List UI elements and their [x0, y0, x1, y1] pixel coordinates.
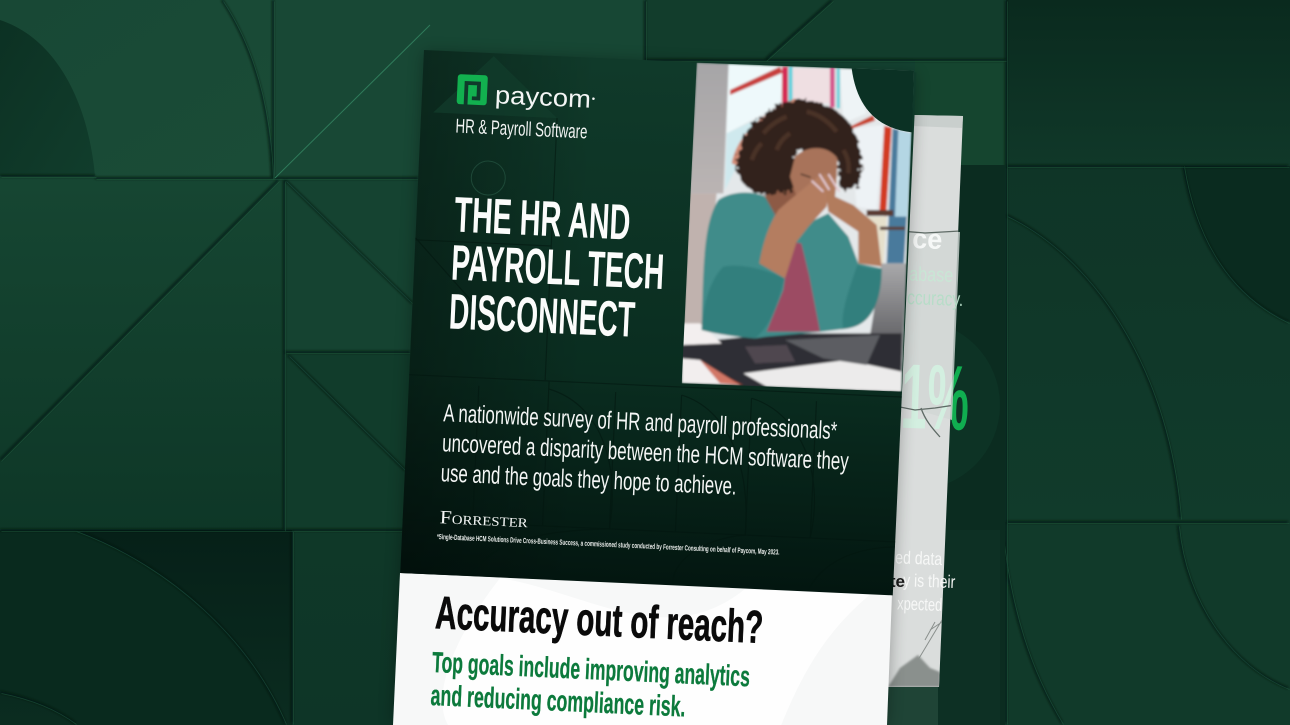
- strip text fragments: [888, 230, 958, 687]
- cardigan torso: [702, 193, 882, 338]
- arms and hands: [759, 175, 828, 278]
- section heading: Accuracy out of reach?: [434, 586, 764, 653]
- logo: paycom: [456, 74, 596, 114]
- heading fragment: ce: [912, 223, 943, 255]
- title: DISCONNECT: [448, 283, 636, 348]
- panel: dark cover: [400, 50, 916, 595]
- left sleeve: [702, 266, 784, 338]
- panel: white accuracy section background: [393, 573, 892, 725]
- title: PAYROLL TECH: [450, 234, 665, 300]
- photo: stressed woman at desk: [682, 63, 914, 393]
- fragment: improved data line 1: ed data: [895, 547, 943, 569]
- wordmark: paycom: [494, 81, 592, 114]
- faint geometric pattern on cover: [400, 53, 916, 595]
- title: THE HR AND: [453, 187, 632, 251]
- fragment: line 3: xpected: [897, 593, 943, 615]
- registered mark: [592, 97, 595, 100]
- intro text: use and the goals they hope to achieve.: [440, 459, 737, 501]
- footnote: *Single-Database HCM Solutions Drive Cross-Business Success, a commissioned study conducted by Forrester Consulting on behalf of Paycom, May 2023.: [437, 532, 780, 557]
- shadow of main page: [393, 52, 915, 725]
- panel: accuracy section contents: [429, 575, 870, 725]
- fragment: database: abase: [909, 263, 954, 287]
- cracks: [901, 230, 958, 438]
- second page behind, dark section: [830, 165, 1005, 725]
- second page: light glitch strip: [887, 115, 963, 725]
- intro text: A nationwide survey of HR and payroll professionals*: [443, 399, 838, 445]
- percent on strip: 1%: [899, 346, 971, 450]
- intro text: uncovered a disparity between the HCM software they: [442, 429, 850, 476]
- right sleeve: [843, 265, 882, 328]
- window background: [682, 63, 914, 392]
- fragment: line 2: y is their: [903, 570, 956, 592]
- logo: Forrester: Forrester: [439, 507, 529, 532]
- face: [790, 148, 837, 197]
- corner cutout: [852, 68, 914, 132]
- crumbled paper texture: [888, 620, 942, 687]
- title: [448, 187, 668, 349]
- intro text: [440, 399, 851, 506]
- icon: paycom mark: [457, 74, 488, 106]
- second page: big green percent overflow: 1%: [899, 346, 971, 450]
- table and papers: [682, 333, 902, 393]
- neck and chest: [764, 186, 798, 215]
- main page: [393, 50, 916, 725]
- hair: [737, 100, 861, 195]
- section subheading: Top goals include improving analytics: [431, 647, 751, 693]
- hair highlights: [752, 112, 849, 173]
- fragment: accuracy: ccuracy.: [907, 287, 964, 311]
- shirt: [765, 198, 820, 332]
- section subheading: [430, 647, 751, 725]
- tagline: HR & Payroll Software: [455, 116, 588, 143]
- fragment: bold dark te: te: [890, 572, 905, 591]
